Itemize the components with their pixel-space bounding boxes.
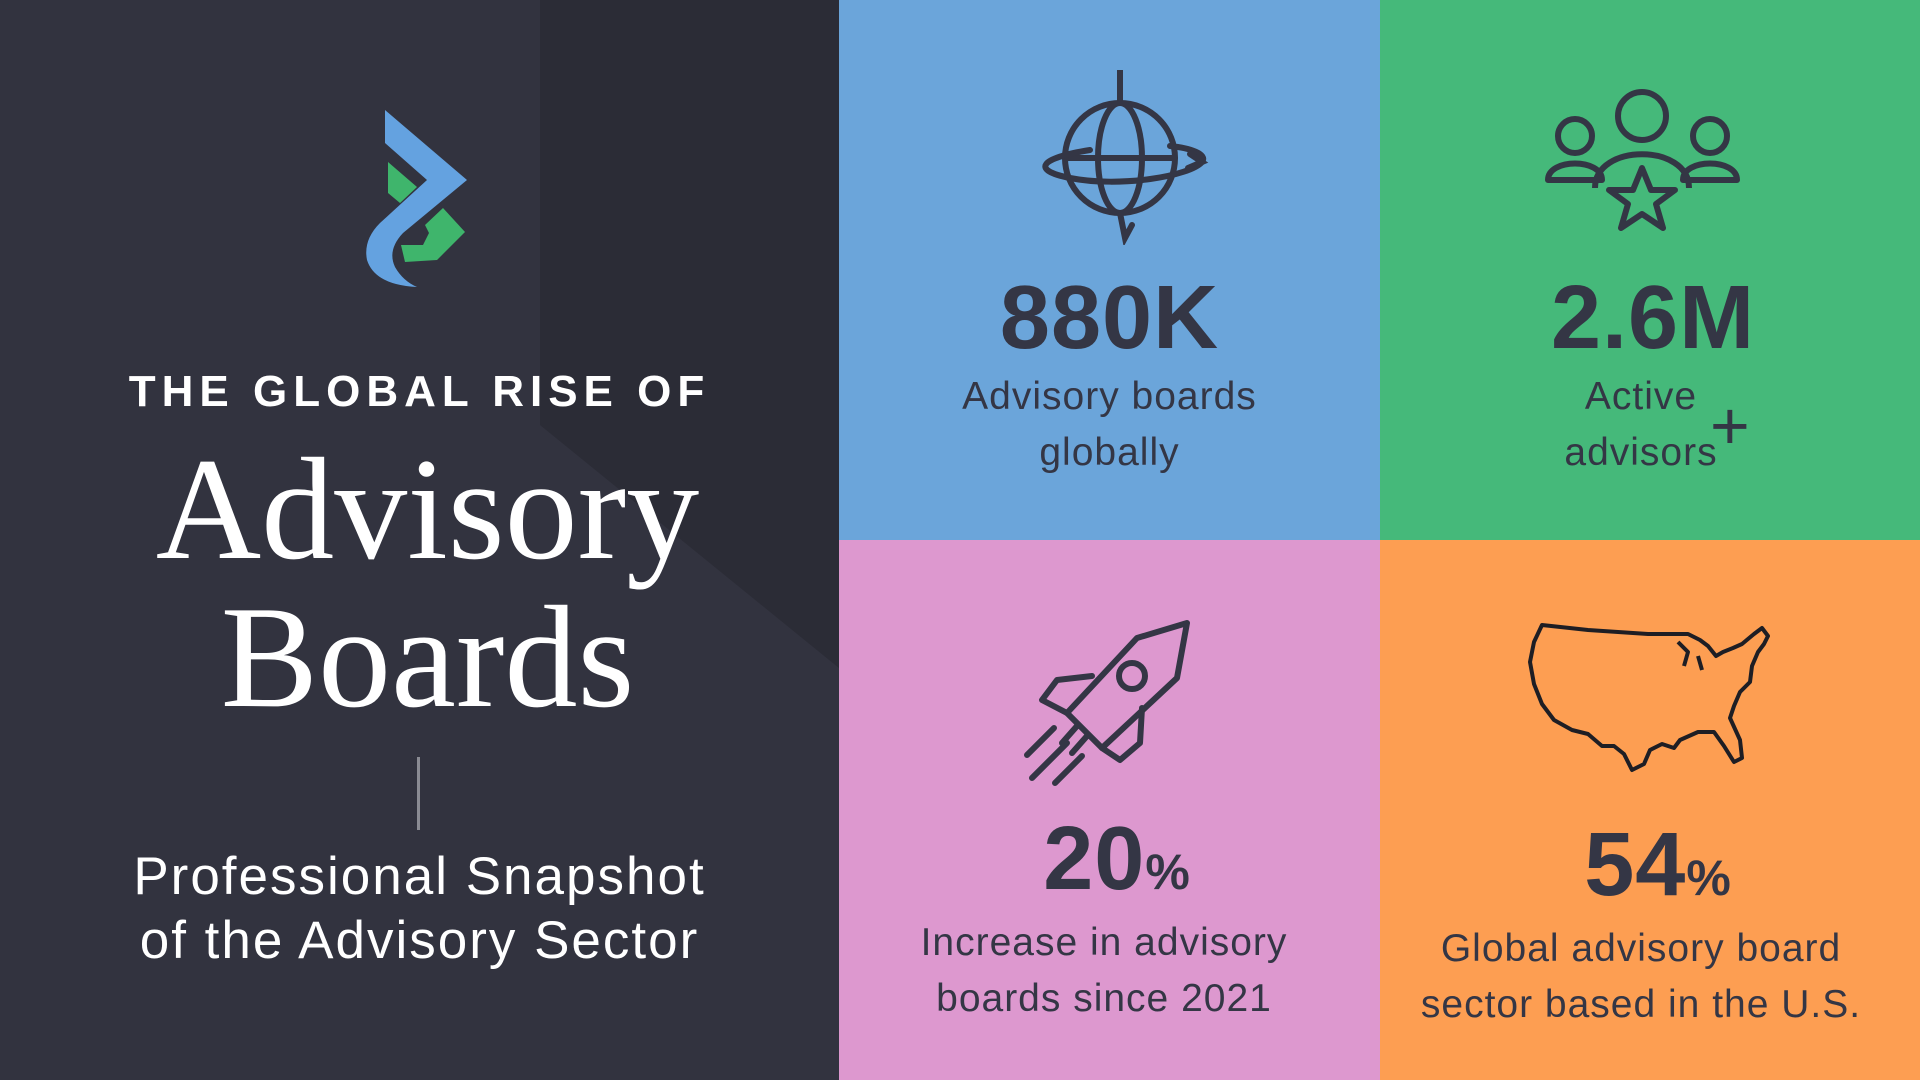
label [962,375,1257,474]
divider line [417,757,420,830]
panel: US share [1380,540,1920,1080]
label: boards since 2021 [936,977,1272,1020]
label [921,921,1287,1020]
icon: rocket [1024,620,1190,786]
label: Increase in advisory [921,921,1287,964]
label [1564,375,1718,474]
label: Active [1585,375,1697,418]
icon: US map [1528,623,1770,772]
label: globally [1039,431,1180,474]
label: Advisory boards [962,375,1257,418]
stat: 20%: 20% [1043,809,1191,909]
subtitle [133,847,706,970]
title: Advisory Boards: Boards [221,576,634,738]
subtitle: Professional Snapshot [133,847,706,906]
label: advisors [1564,431,1718,474]
subtitle: of the Advisory Sector [140,911,699,970]
title: Advisory Boards [156,428,699,738]
plus sign: + [1710,388,1750,464]
panel: left title area [0,0,839,1080]
panel: active advisors [1380,0,1920,540]
label: sector based in the U.S. [1421,983,1861,1026]
panel: growth since 2021 [839,540,1380,1080]
label [1421,927,1861,1026]
heading: the global rise of: THE GLOBAL RISE OF [129,367,710,416]
icon: logo [366,110,467,287]
stat: 54%: 54% [1584,815,1732,915]
title: Advisory Boards: Advisory [156,428,699,590]
panel: advisory boards globally [839,0,1380,540]
label: Global advisory board [1441,927,1841,970]
background shading [540,0,839,668]
stat: 2.6M: 2.6M [1551,268,1755,368]
icon: team with star [1545,89,1740,231]
icon: globe [1042,70,1208,245]
stat: 880K: 880K [1000,268,1219,368]
